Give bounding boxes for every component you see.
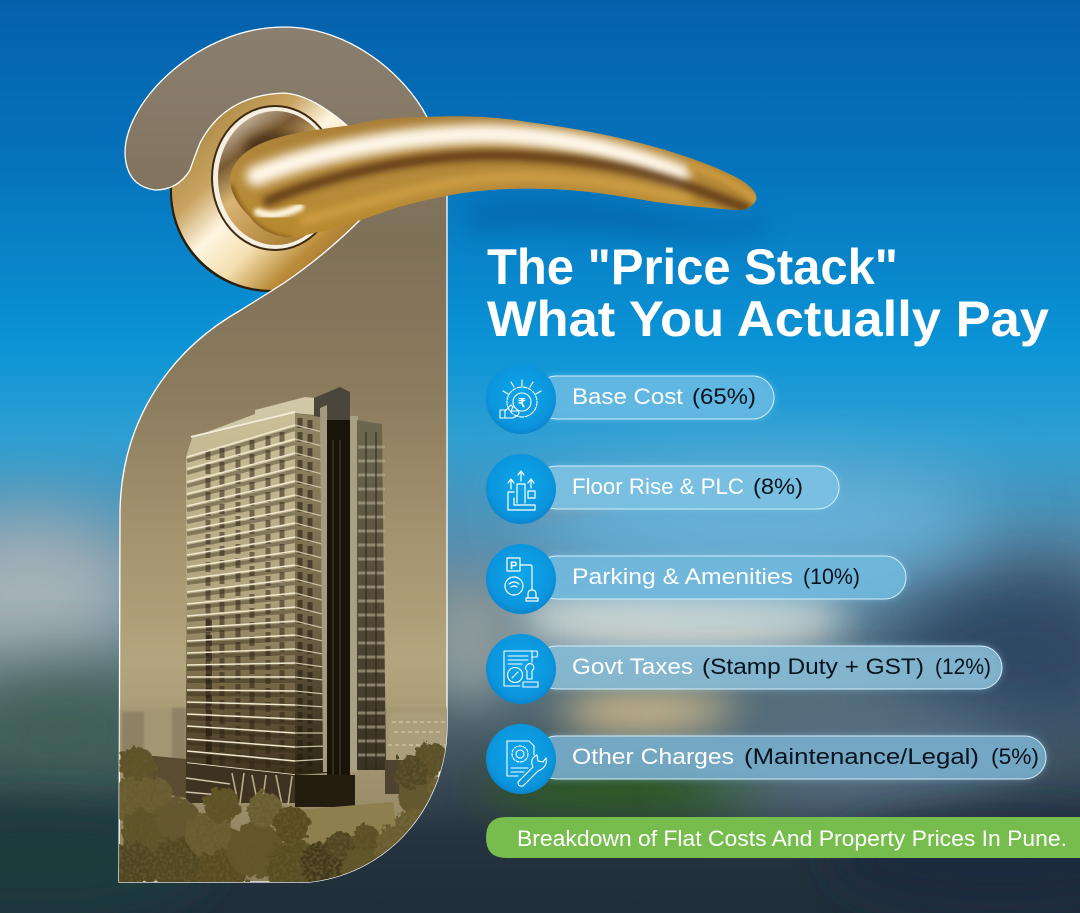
icon: parking and wifi: P [510,560,517,572]
pill: parking [535,556,906,599]
pill: other charges [535,736,1046,779]
title: What You Actually Pay [487,291,1049,347]
label: base cost [572,384,756,409]
green caption bar [486,817,1080,858]
pill: govt taxes [535,646,1002,689]
left face [186,413,295,775]
distant city haze [120,708,450,768]
item: parking [486,544,906,614]
item: other charges [486,724,1046,794]
icon: tax document with stamp [486,634,556,704]
title [487,239,1049,347]
item: floor rise [486,454,839,524]
label: other charges: (5%) [991,744,1039,769]
pier [320,405,328,772]
lawn [298,802,400,850]
label: other charges [572,744,1039,769]
right face [357,420,386,770]
handle shadow [470,202,770,238]
label: parking [572,564,860,589]
icon: rupee gear with thumbs up [486,364,556,434]
title: The "Price Stack" [487,239,898,295]
roof [191,397,315,438]
door plate behind handle [170,92,372,292]
label: govt taxes: (12%) [935,654,991,679]
label: base cost: (65%) [692,384,756,409]
icon: rupee gear with thumbs up: ₹ [518,396,526,410]
photo: tower and trees [108,387,455,901]
label: parking: Parking & Amenities [572,564,793,589]
label: base cost: Base Cost [572,384,683,409]
label: other charges: (Maintenance/Legal) [744,744,979,769]
icon: parking and wifi [486,544,556,614]
pill: floor rise [535,466,839,509]
tower [144,387,409,807]
door handle [230,116,760,240]
label: other charges: Other Charges [572,744,734,769]
podium [144,755,186,798]
trees [119,740,446,882]
green caption bar: Breakdown of Flat Costs And Property Prices In Pune. [517,826,1067,851]
label: govt taxes: (Stamp Duty + GST) [702,654,924,679]
label: govt taxes: Govt Taxes [572,654,693,679]
label: parking: (10%) [803,564,860,589]
icon: rising floors [486,454,556,524]
label: govt taxes [572,654,991,679]
label: floor rise: (8%) [753,474,803,499]
label: floor rise: Floor Rise & PLC [572,474,744,499]
dark core [327,420,350,800]
middle face [295,413,327,775]
light pillar [350,416,358,772]
pill: base cost [535,376,774,419]
item: base cost [486,364,774,434]
icon: gear document with wrench [486,724,556,794]
door hanger [108,27,455,901]
item: govt taxes [486,634,1002,704]
